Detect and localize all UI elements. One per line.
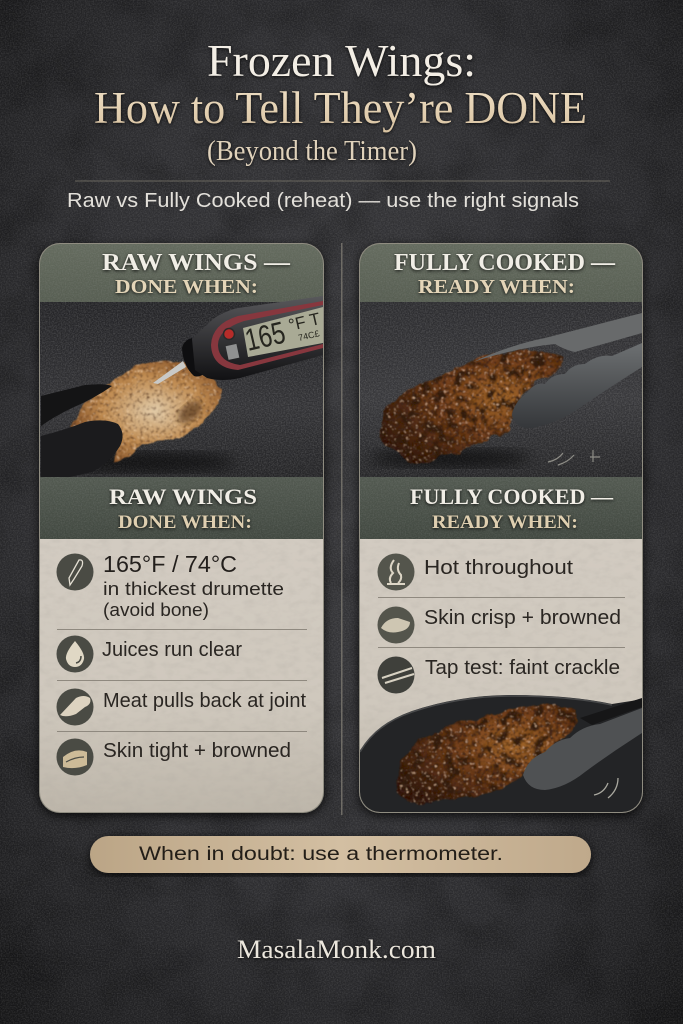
title: How to Tell They’re DONE [94, 83, 587, 133]
icon: thermometer probe [56, 554, 94, 590]
subtitle: Raw vs Fully Cooked (reheat) — use the right signals [67, 190, 579, 212]
raw item: juices: Juices run clear [102, 639, 242, 661]
motion marks [594, 778, 618, 798]
motion marks [548, 450, 600, 465]
photo: thermometer in raw wing [40, 296, 323, 477]
thermometer: 165 [242, 315, 289, 358]
icon: juice drop [56, 636, 94, 672]
raw item: skin: Skin tight + browned [103, 740, 291, 762]
cooked item: skin: Skin crisp + browned [424, 607, 621, 629]
cooked band heading: FULLY COOKED — [410, 484, 614, 509]
cooked panel heading: READY WHEN: [418, 276, 575, 298]
raw item: meat: Meat pulls back at joint [103, 690, 306, 712]
metal tongs [473, 313, 642, 428]
icon: flame [378, 554, 414, 590]
cooked panel header [359, 243, 643, 302]
cooked band heading [410, 484, 614, 533]
title: Frozen Wings: [207, 36, 476, 86]
cooked wing [380, 350, 565, 463]
raw item: temperature: (avoid bone) [103, 600, 209, 620]
footer brand: MasalaMonk.com [237, 935, 436, 964]
raw band heading: DONE WHEN: [118, 512, 252, 533]
plate tongs [523, 698, 642, 790]
icon: browned skin [56, 738, 94, 776]
raw item: temperature [103, 551, 284, 620]
raw panel heading: DONE WHEN: [115, 276, 258, 298]
icon: meat at joint [56, 688, 94, 726]
raw band heading [109, 484, 257, 533]
thermometer [153, 296, 323, 384]
cooked band heading: READY WHEN: [432, 512, 578, 533]
panel: fully cooked [350, 243, 650, 820]
cooked item: tap test: Tap test: faint crackle [425, 657, 620, 679]
title divider [75, 180, 610, 182]
cooked panel heading: FULLY COOKED — [394, 250, 616, 276]
raw panel heading [102, 250, 291, 298]
raw panel band [39, 477, 324, 539]
callout pill [90, 836, 591, 873]
raw band heading: RAW WINGS [109, 484, 257, 509]
cooked item: hot: Hot throughout [424, 557, 573, 579]
raw item: temperature: 165°F / 74°C [103, 551, 237, 577]
column divider [341, 243, 342, 815]
raw row dividers [57, 629, 307, 732]
cooked panel body [359, 539, 643, 813]
cooked panel heading [394, 250, 616, 298]
raw panel header [39, 243, 324, 302]
cooked panel band [359, 477, 643, 539]
raw panel heading: RAW WINGS — [102, 250, 291, 276]
title: (Beyond the Timer) [207, 135, 417, 167]
icon: crossed tongs [378, 656, 414, 694]
raw panel body [39, 539, 324, 813]
raw item: temperature: in thickest drumette [103, 579, 284, 599]
tongs [41, 384, 123, 477]
photo: tongs holding cooked wing [360, 302, 642, 477]
cooked row dividers [378, 597, 625, 648]
raw wing [70, 360, 222, 462]
plated wing [396, 704, 578, 802]
photo: wing on plate [360, 695, 642, 812]
thermometer: °F T [287, 309, 322, 335]
callout pill: When in doubt: use a thermometer. [139, 844, 503, 865]
panel: raw wings [39, 243, 324, 813]
icon: crisp wing [378, 606, 414, 644]
thermometer: 74C£ [297, 328, 320, 343]
title [94, 36, 587, 167]
